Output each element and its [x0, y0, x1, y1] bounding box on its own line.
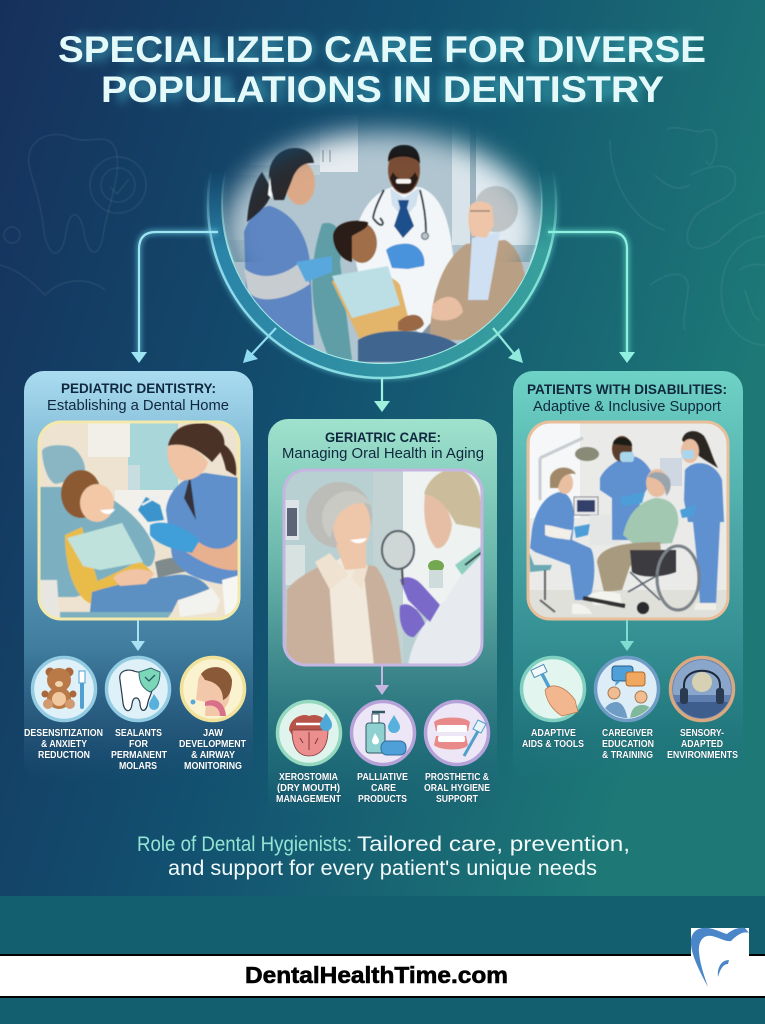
icon: caregiver education	[596, 658, 658, 722]
labels: disabilities topics	[522, 727, 738, 761]
labels: geriatric topics: ORAL HYGIENE	[424, 782, 490, 794]
labels: geriatric topics: PALLIATIVE	[357, 771, 408, 783]
labels: geriatric topics: PRODUCTS	[358, 793, 407, 805]
faint dental line art	[0, 128, 765, 345]
heading: pediatric: PEDIATRIC DENTISTRY:	[61, 380, 216, 396]
labels: pediatric topics: REDUCTION	[38, 749, 90, 761]
role of dental hygienists statement	[137, 832, 630, 880]
icon: dentures and toothbrush	[426, 702, 488, 764]
labels: pediatric topics: FOR	[129, 738, 148, 750]
elder woman	[430, 240, 528, 340]
heading: geriatric	[282, 429, 484, 462]
labels: geriatric topics	[276, 771, 490, 805]
arrow: to pediatric panel	[131, 232, 218, 363]
labels: disabilities topics: ENVIRONMENTS	[667, 749, 738, 761]
heading: pediatric	[47, 380, 229, 414]
title: SPECIALIZED CARE FOR DIVERSE	[58, 29, 706, 70]
heading: geriatric: GERIATRIC CARE:	[325, 429, 441, 445]
labels: geriatric topics: (DRY MOUTH)	[277, 782, 340, 794]
arrow: to geriatric panel	[374, 378, 390, 412]
icon: adaptive toothbrush	[522, 658, 584, 720]
labels: geriatric topics: CARE	[371, 782, 396, 794]
labels: disabilities topics: CAREGIVER	[602, 727, 653, 739]
icon: teddy bear and toothbrush	[32, 658, 96, 720]
icon: sensory-adapted environment	[670, 658, 734, 720]
chair	[312, 223, 352, 360]
role of dental hygienists statement: Role of Dental Hygienists:	[137, 832, 352, 856]
labels: disabilities topics: ADAPTIVE	[531, 727, 576, 739]
labels: disabilities topics: ADAPTED	[681, 738, 723, 750]
labels: geriatric topics: SUPPORT	[436, 793, 478, 805]
labels: disabilities topics: AIDS & TOOLS	[522, 738, 584, 750]
role of dental hygienists statement: Tailored care, prevention,	[357, 832, 630, 856]
title: POPULATIONS IN DENTISTRY	[117, 69, 647, 110]
labels: geriatric topics: XEROSTOMIA	[279, 771, 338, 783]
role of dental hygienists statement: and support for every patient's unique needs	[168, 856, 597, 880]
heading: geriatric: Managing Oral Health in Aging	[282, 446, 484, 462]
labels: pediatric topics	[24, 727, 246, 772]
title: POPULATIONS IN DENTISTRY	[101, 69, 664, 110]
panel: pediatric dentistry	[24, 371, 253, 781]
labels: disabilities topics: SENSORY-	[680, 727, 724, 739]
heading: disabilities: PATIENTS WITH DISABILITIES:	[527, 381, 727, 397]
heading: pediatric: Establishing a Dental Home	[47, 398, 229, 414]
labels: pediatric topics: DEVELOPMENT	[179, 738, 246, 750]
photo: wheelchair patient with care team	[527, 421, 729, 620]
labels: geriatric topics: PROSTHETIC &	[425, 771, 489, 783]
arrow: diagonal right	[493, 328, 523, 363]
hygienist	[244, 206, 314, 345]
panel: patients with disabilities	[513, 371, 743, 781]
hero photo: dental team with child and elder patient	[222, 112, 542, 363]
title	[58, 29, 706, 110]
labels: pediatric topics: & ANXIETY	[41, 738, 87, 750]
labels: pediatric topics: PERMANENT	[111, 749, 167, 761]
labels: geriatric topics: MANAGEMENT	[276, 793, 341, 805]
labels: disabilities topics: EDUCATION	[602, 738, 654, 750]
panel: geriatric care	[268, 419, 497, 815]
boy	[332, 273, 414, 340]
icon: tooth logo	[691, 928, 749, 987]
photo: elder patient with magnifier	[283, 469, 483, 666]
labels: pediatric topics: MONITORING	[184, 760, 242, 772]
footer band	[0, 954, 765, 998]
title: SPECIALIZED CARE FOR DIVERSE	[72, 29, 692, 70]
labels: pediatric topics: DESENSITIZATION	[24, 727, 103, 739]
arrow: diagonal left	[243, 328, 276, 363]
photo: child in chair with hygienist	[38, 421, 240, 625]
arrow: geriatric to topics	[375, 666, 389, 695]
arrow: to disabilities panel	[548, 232, 635, 363]
labels: pediatric topics: SEALANTS	[115, 727, 162, 739]
labels: pediatric topics: JAW	[203, 727, 223, 739]
arrow: pediatric to topics	[131, 620, 145, 651]
icon: jaw profile	[182, 658, 244, 720]
doctor	[353, 187, 454, 335]
labels: pediatric topics: & AIRWAY	[191, 749, 235, 761]
website: DentalHealthTime.com	[245, 962, 508, 988]
arrow: disabilities to topics	[620, 620, 634, 651]
icon: tooth sealant with shield	[106, 658, 170, 720]
labels: pediatric topics: MOLARS	[119, 760, 157, 772]
labels: disabilities topics: & TRAINING	[602, 749, 653, 761]
icon: dry mouth tongue	[278, 702, 340, 764]
hero ring	[204, 174, 560, 382]
heading: disabilities	[527, 381, 727, 415]
heading: disabilities: Adaptive & Inclusive Support	[533, 399, 721, 415]
icon: palliative care products	[352, 702, 414, 764]
